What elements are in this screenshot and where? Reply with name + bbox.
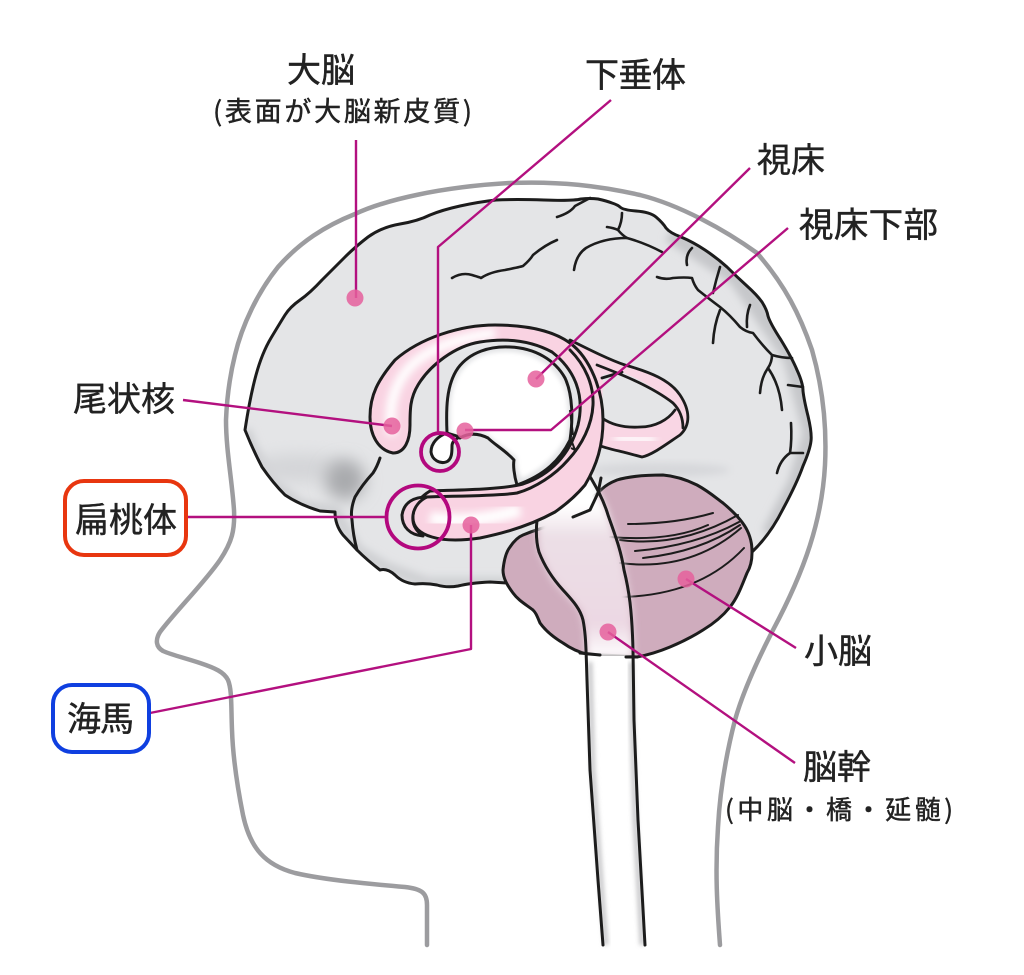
- label: pituitary: 下垂体: [585, 57, 686, 95]
- leader lines: [150, 100, 796, 763]
- label: cerebellum: 小脳: [804, 633, 872, 671]
- marker dots: [346, 290, 694, 640]
- label: cerebrum note: (表面が大脳新皮質): [213, 90, 472, 129]
- head outline: [157, 183, 825, 945]
- label box: hippocampus: 海馬: [67, 701, 134, 739]
- label: brainstem: 脳幹: [803, 749, 871, 787]
- amygdala: [386, 486, 450, 548]
- label: caudate nucleus: 尾状核: [73, 381, 175, 419]
- pituitary: [421, 433, 460, 471]
- label: brainstem note: (中脳・橋・延髄): [725, 790, 953, 827]
- cerebrum: [245, 198, 812, 587]
- label: hypothalamus: 視床下部: [799, 207, 938, 245]
- label box: hippocampus: [53, 685, 149, 752]
- label box: amygdala: [65, 481, 186, 555]
- caudate and hippocampus band: [370, 325, 603, 540]
- cerebrum sulci: [452, 198, 803, 473]
- label box: amygdala: 扁桃体: [75, 502, 177, 540]
- fornix ribbon: [570, 340, 688, 457]
- label: thalamus: 視床: [757, 142, 825, 180]
- brainstem: [522, 468, 645, 945]
- thalamus: [447, 347, 575, 485]
- cerebellum: [503, 475, 752, 657]
- label: cerebrum: 大脳: [287, 52, 355, 90]
